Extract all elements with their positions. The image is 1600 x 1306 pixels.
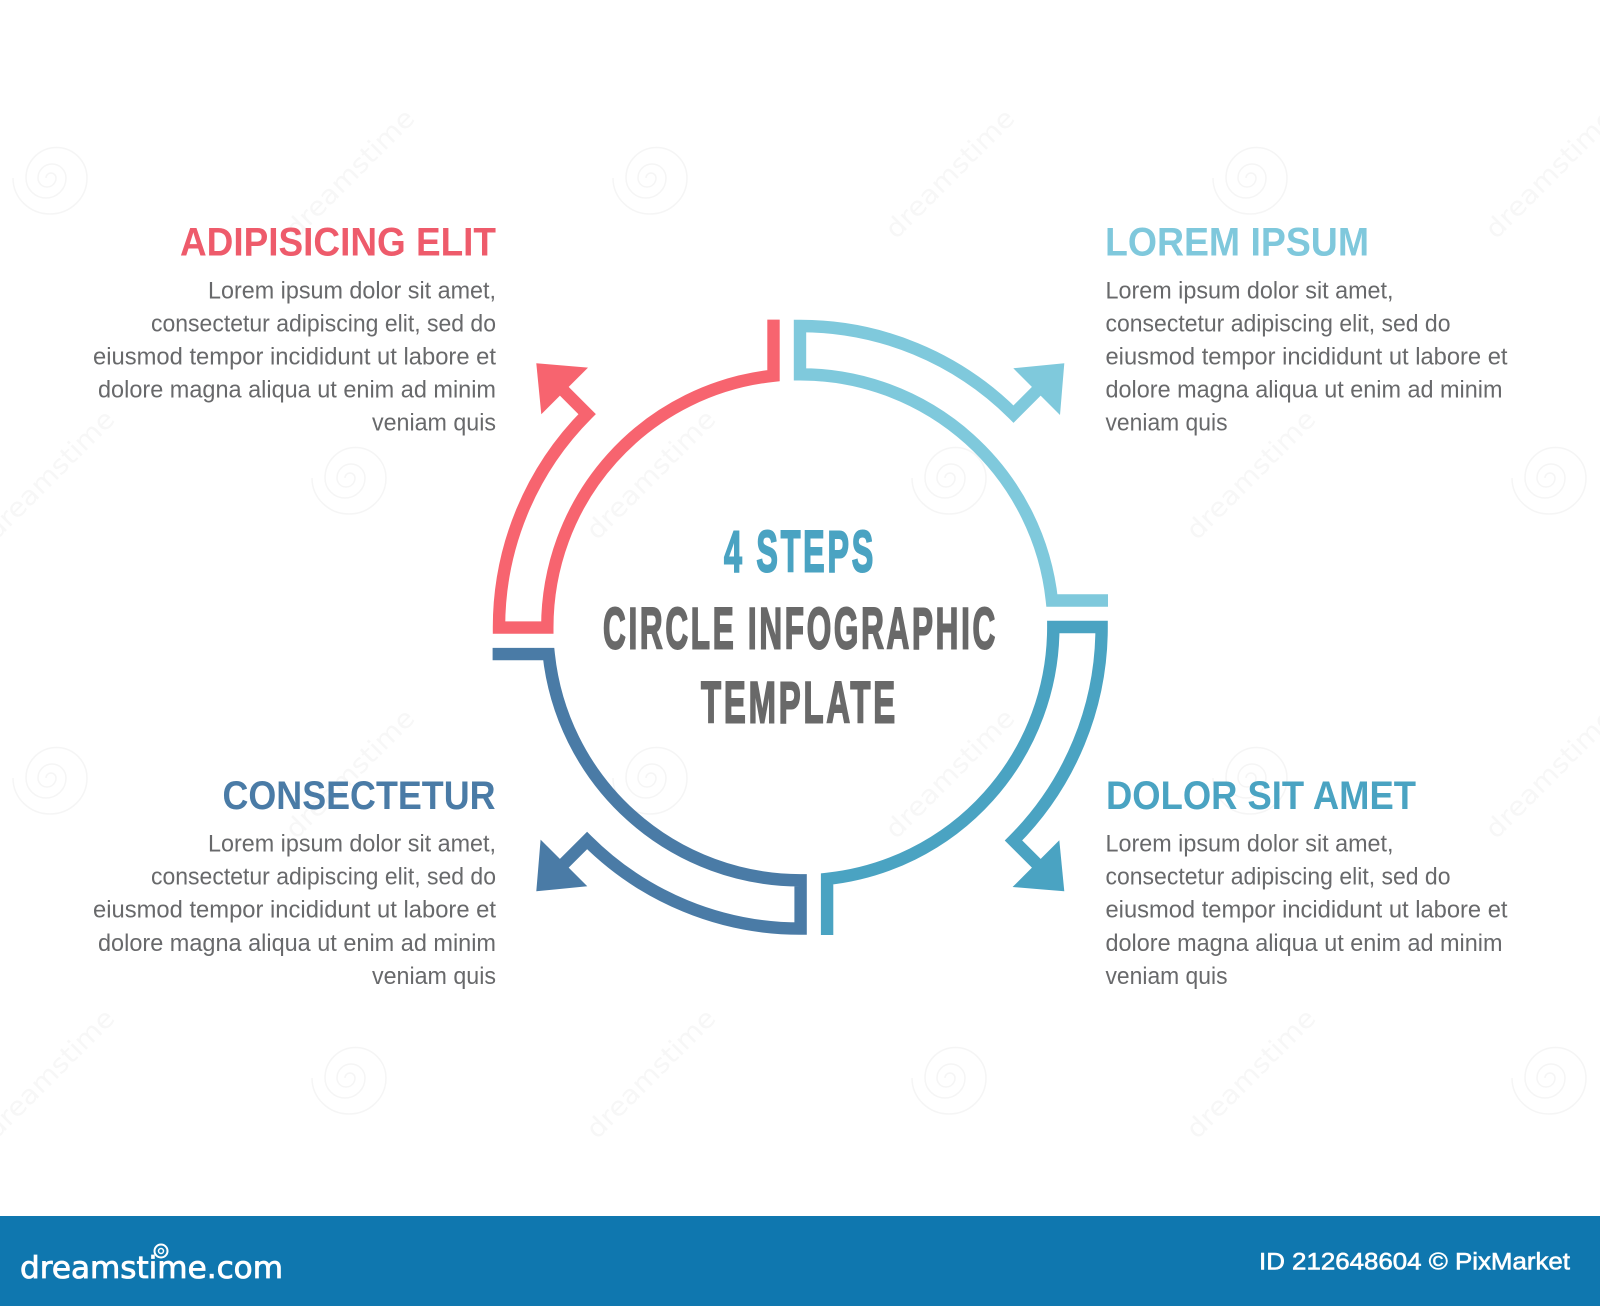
text block: consectetur: eiusmod tempor incididunt ut labore et xyxy=(93,897,496,924)
watermark pattern: dreamstime xyxy=(880,704,1021,845)
heading: lorem ipsum: LOREM IPSUM xyxy=(1105,221,1369,265)
heading: consectetur: CONSECTETUR xyxy=(222,774,496,818)
logo: dreamstime: dreamstime.com xyxy=(20,1251,283,1286)
arrow: dolor sit amet segment xyxy=(827,627,1102,935)
title line: 4 steps: 4 STEPS xyxy=(724,520,876,585)
watermark pattern: dreamstime xyxy=(581,1004,722,1145)
text block: dolor sit amet: eiusmod tempor incididunt ut labore et xyxy=(1106,897,1508,924)
arrow: lorem ipsum segment xyxy=(800,326,1108,600)
text block: dolor sit amet xyxy=(1106,830,1508,990)
circle diagram xyxy=(493,320,1108,935)
text block: lorem ipsum: eiusmod tempor incididunt ut labore et xyxy=(1106,344,1508,370)
text block: consectetur: veniam quis xyxy=(372,963,496,990)
text block: adipisicing elit: veniam quis xyxy=(372,410,496,437)
text block: adipisicing elit: dolore magna aliqua ut enim ad minim xyxy=(98,377,496,404)
text block: adipisicing elit: consectetur adipiscing elit, sed do xyxy=(151,310,496,337)
panel: lorem ipsum xyxy=(1105,221,1508,437)
text block: dolor sit amet: consectetur adipiscing elit, sed do xyxy=(1106,864,1450,891)
watermark pattern: dreamstime xyxy=(280,704,421,845)
heading: adipisicing elit: ADIPISICING ELIT xyxy=(180,221,496,265)
arrow: consectetur segment xyxy=(493,654,801,929)
text block: consectetur: dolore magna aliqua ut enim ad minim xyxy=(98,930,496,957)
watermark pattern xyxy=(0,104,1600,1145)
text block: lorem ipsum: consectetur adipiscing elit, sed do xyxy=(1106,310,1450,337)
text block: lorem ipsum: veniam quis xyxy=(1106,410,1228,437)
footer banner xyxy=(0,1216,1600,1306)
text block: lorem ipsum: Lorem ipsum dolor sit amet, xyxy=(1106,277,1394,304)
heading: dolor sit amet: DOLOR SIT AMET xyxy=(1106,774,1416,818)
text block: dolor sit amet: Lorem ipsum dolor sit amet, xyxy=(1106,830,1394,858)
panel: adipisicing elit xyxy=(93,221,496,437)
watermark pattern: dreamstime xyxy=(280,104,421,245)
panel: consectetur xyxy=(93,774,496,990)
text block: consectetur: consectetur adipiscing elit, sed do xyxy=(151,864,496,891)
text block: lorem ipsum xyxy=(1106,277,1508,437)
watermark pattern: dreamstime xyxy=(1181,1004,1322,1145)
watermark pattern: dreamstime xyxy=(581,405,722,546)
title line: template: TEMPLATE xyxy=(701,670,898,735)
text block: consectetur: Lorem ipsum dolor sit amet, xyxy=(208,830,496,858)
text block: dolor sit amet: veniam quis xyxy=(1106,963,1228,990)
text block: adipisicing elit: eiusmod tempor incididunt ut labore et xyxy=(93,344,496,370)
text block: adipisicing elit xyxy=(93,277,496,437)
text block: consectetur xyxy=(93,830,496,990)
text block: adipisicing elit: Lorem ipsum dolor sit amet, xyxy=(208,277,496,304)
center title xyxy=(603,520,998,735)
watermark pattern: dreamstime xyxy=(880,104,1021,245)
text block: lorem ipsum: dolore magna aliqua ut enim ad minim xyxy=(1106,377,1502,404)
arrow: adipisicing elit segment xyxy=(499,320,774,628)
image id credit: ID 212648604 © PixMarket xyxy=(1259,1248,1570,1276)
text block: dolor sit amet: dolore magna aliqua ut enim ad minim xyxy=(1106,930,1502,957)
title line: circle infographic: CIRCLE INFOGRAPHIC xyxy=(603,596,998,661)
panel: dolor sit amet xyxy=(1106,774,1508,990)
watermark pattern: dreamstime xyxy=(1181,405,1322,546)
